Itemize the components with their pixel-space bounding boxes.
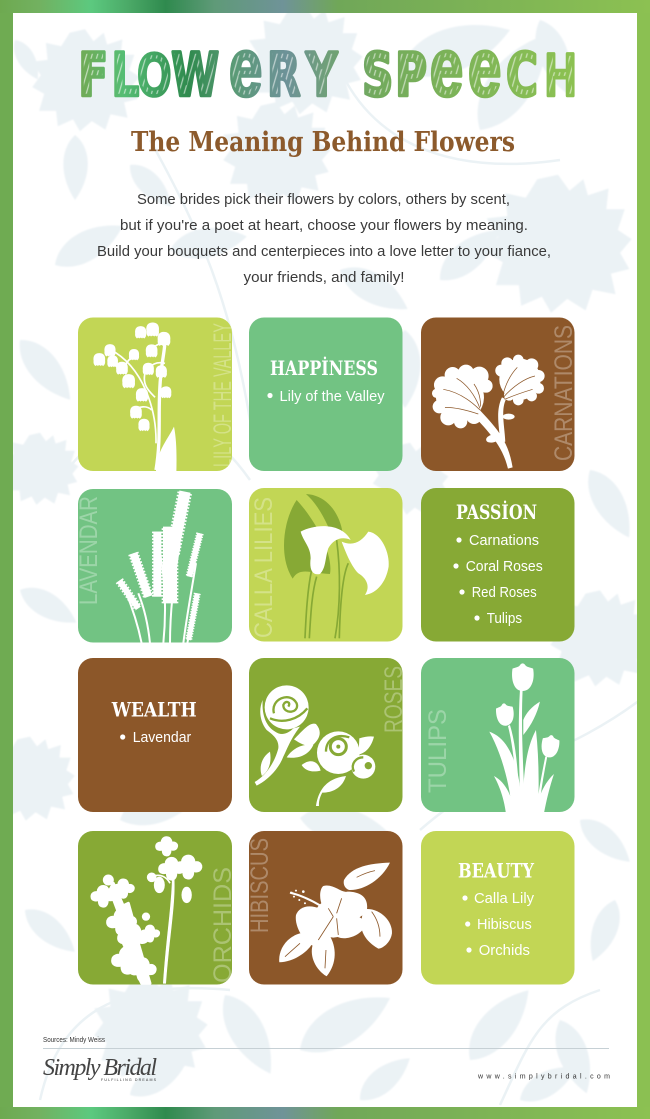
intro text: Build your bouquets and centerpieces into a love letter to your fiance,	[97, 244, 551, 260]
card: tulips	[421, 658, 574, 830]
icon: orchids	[92, 837, 201, 983]
title: H	[545, 43, 576, 109]
title: O	[138, 43, 171, 109]
card: wealth	[78, 658, 232, 812]
icon: calla lilies	[284, 494, 389, 638]
intro text	[97, 192, 551, 286]
intro text: but if you're a poet at heart, choose your flowers by meaning.	[120, 218, 528, 234]
title: e	[468, 22, 501, 114]
card: hibiscus	[246, 831, 402, 984]
intro text: Some brides pick their flowers by colors, others by scent,	[137, 192, 510, 208]
title: R	[267, 40, 300, 110]
card: beauty	[421, 831, 574, 984]
icon: hibiscus	[279, 863, 392, 976]
list: passion: Red Roses	[472, 584, 537, 601]
title: Y	[305, 40, 338, 110]
icon: lily of the valley	[93, 322, 177, 487]
card: lily of the valley	[78, 318, 237, 487]
heading: passion: PASSİON	[456, 500, 537, 524]
icon: lavender	[119, 492, 200, 643]
logo: Simply Bridal: Simply Bridal	[43, 1055, 157, 1081]
logo: Simply Bridal: FULFILLING DREAMS	[101, 1078, 157, 1082]
card: lavender	[75, 489, 232, 643]
card: carnations	[421, 318, 578, 471]
label: lily of the valley: LILY OF THE VALLEY	[209, 323, 237, 467]
list: passion	[453, 532, 543, 627]
label: lavender: LAVENDAR	[75, 496, 103, 605]
sources note: Sources: Mindy Weiss	[43, 1037, 105, 1044]
icon: roses	[255, 685, 375, 806]
list: beauty: Hibiscus	[477, 916, 532, 933]
list: passion: Coral Roses	[466, 558, 543, 575]
card: calla lilies	[249, 488, 402, 642]
card: roses	[249, 658, 408, 812]
title: e	[229, 22, 262, 114]
subtitle: The Meaning Behind Flowers	[131, 127, 515, 158]
label: hibiscus: HIBISCUS	[246, 838, 274, 933]
title: S	[362, 40, 393, 110]
title	[78, 22, 576, 114]
label: roses: ROSES	[380, 666, 408, 733]
label: calla lilies: CALLA LILIES	[250, 497, 278, 638]
list: beauty	[462, 890, 534, 959]
card: passion	[421, 488, 574, 642]
title: e	[430, 22, 463, 114]
label: orchids: ORCHIDS	[209, 867, 237, 983]
icon: tulips	[489, 663, 560, 830]
intro text: your friends, and family!	[244, 270, 404, 286]
title: L	[112, 40, 139, 110]
heading: wealth: WEALTH	[111, 698, 197, 722]
card: orchids	[78, 831, 237, 984]
list: beauty: Orchids	[479, 942, 530, 959]
list: beauty: Calla Lily	[474, 890, 534, 907]
list: happiness: Lily of the Valley	[280, 388, 385, 405]
title: C	[506, 40, 538, 110]
label: carnations: CARNATIONS	[550, 325, 578, 461]
title: P	[395, 40, 427, 110]
website url: www.simplybridal.com	[477, 1074, 610, 1080]
list: passion: Carnations	[469, 532, 539, 549]
heading: beauty: BEAUTY	[458, 859, 535, 883]
card: happiness	[249, 318, 402, 471]
list: wealth: Lavendar	[133, 729, 191, 746]
icon: carnations	[432, 355, 545, 469]
title: F	[78, 40, 108, 110]
label: tulips: TULIPS	[424, 709, 452, 793]
list: passion: Tulips	[487, 610, 522, 627]
heading: happiness: HAPPİNESS	[270, 356, 378, 380]
title: W	[171, 40, 219, 110]
